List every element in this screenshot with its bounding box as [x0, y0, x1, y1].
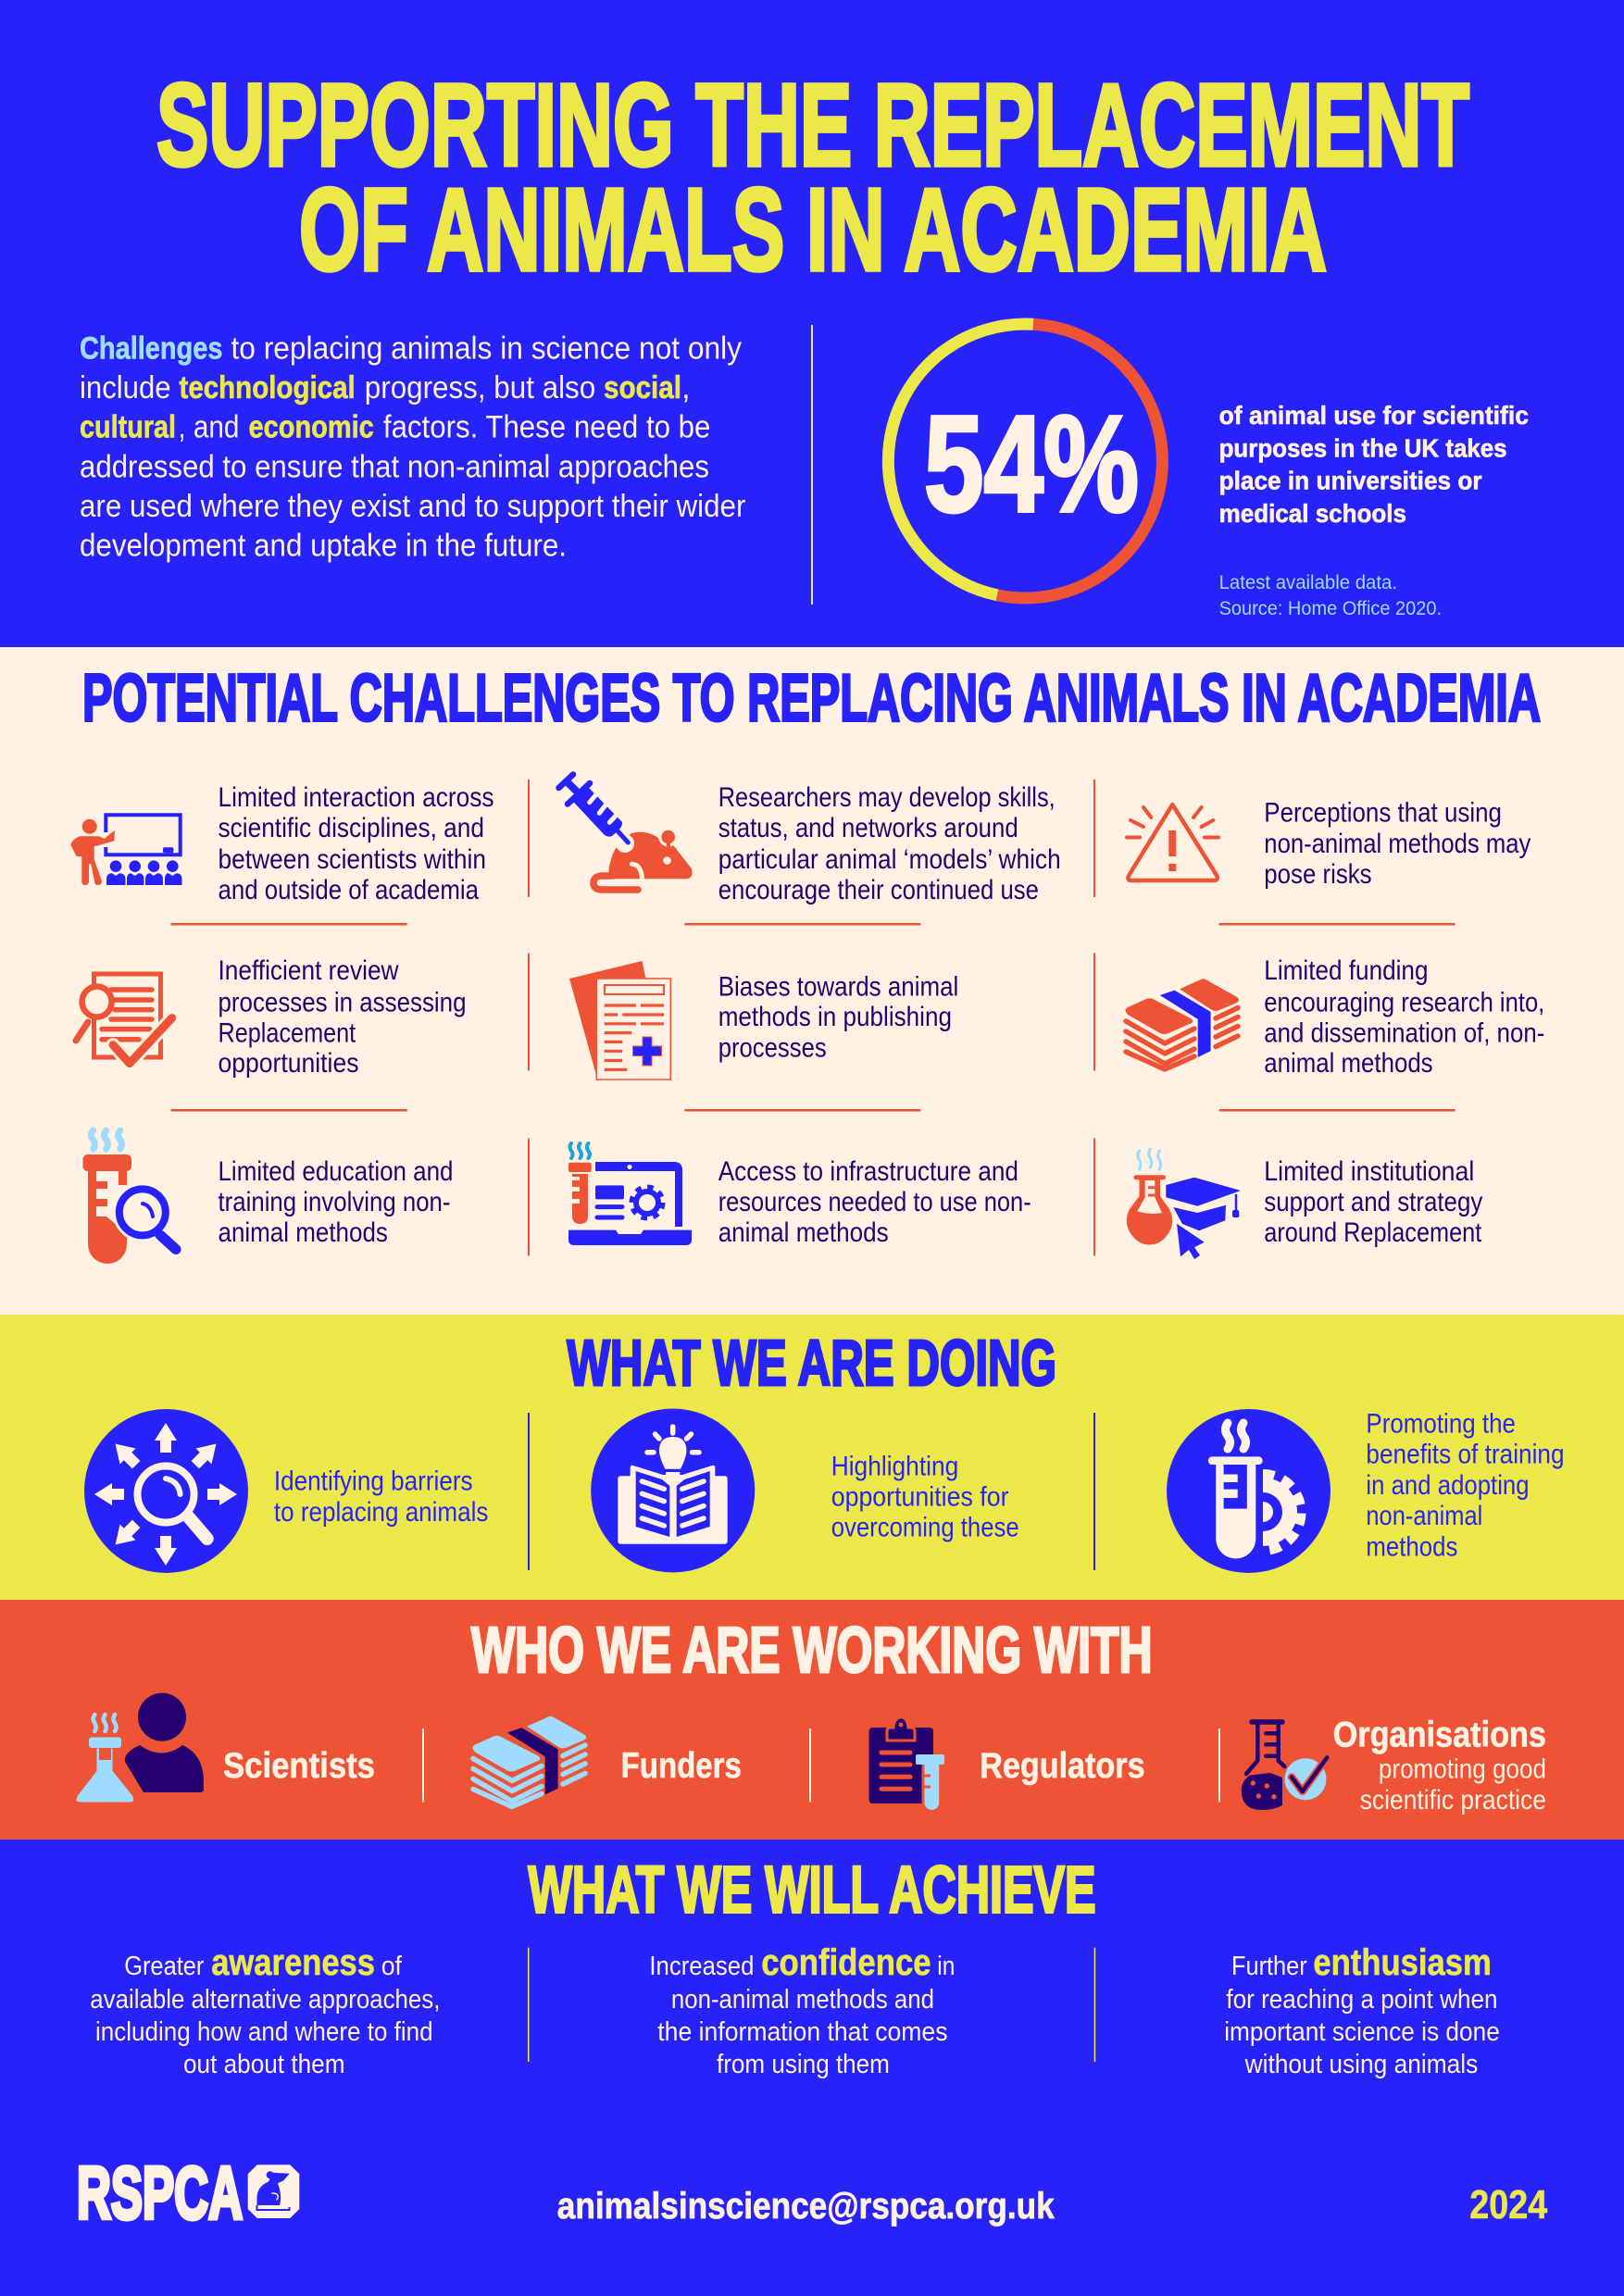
achieve: greater awareness: out about them	[183, 2050, 344, 2079]
text: highlighting	[831, 1452, 1019, 1542]
stat description: place in universities or	[1219, 467, 1482, 494]
text: limited interaction	[219, 782, 494, 905]
icon: laptop with test tube and gear	[568, 1143, 692, 1245]
text: inefficient review: Replacement	[219, 1018, 356, 1048]
text: promoting the benefits: Promoting the	[1366, 1409, 1516, 1439]
source note: Source: Home Office 2020.	[1219, 598, 1442, 619]
stat description: purposes in the UK takes	[1219, 433, 1507, 463]
text: limited interaction: Limited interaction across	[219, 782, 494, 813]
text: highlighting: opportunities for	[831, 1481, 1009, 1513]
icon: stack of banknotes	[1125, 979, 1239, 1069]
intro paragraph	[80, 331, 745, 563]
icon: warning triangle	[1127, 805, 1218, 880]
achieve: increased confidence	[649, 1942, 955, 2079]
text: identifying barriers	[274, 1466, 488, 1528]
text: access to infrastructure: resources needed to use non-	[718, 1187, 1031, 1217]
text: limited institutional: Limited institutional	[1264, 1156, 1474, 1187]
achieve: greater awareness: available alternative approaches,	[90, 1985, 440, 2015]
logo: RSPCA: RSPCA	[77, 2152, 243, 2234]
icon: teacher and audience	[71, 815, 181, 885]
icon: magnifier with arrows	[84, 1409, 248, 1573]
achieve: increased confidence: in	[937, 1952, 955, 1981]
intro paragraph: technological	[180, 370, 356, 406]
achieve: greater awareness	[90, 1942, 440, 2079]
intro paragraph: social	[604, 370, 681, 406]
label: organisations	[1333, 1715, 1546, 1816]
text: limited funding	[1264, 955, 1544, 1079]
label: organisations: Organisations	[1333, 1715, 1546, 1755]
text: inefficient review	[219, 955, 467, 1079]
title	[156, 59, 1469, 294]
icon: publishing documents	[569, 961, 670, 1079]
source note	[1219, 572, 1442, 619]
text: biases: Biases towards animal	[718, 972, 958, 1002]
text: limited funding: and dissemination of, non-	[1264, 1018, 1544, 1048]
contact email: animalsinscience@rspca.org.uk	[557, 2186, 1055, 2227]
text: limited education: animal methods	[219, 1217, 388, 1248]
label: organisations: promoting good	[1379, 1753, 1546, 1785]
intro paragraph: Challenges	[80, 331, 222, 367]
stat description	[1219, 401, 1529, 528]
achieve: greater awareness: Greater	[124, 1952, 205, 1981]
text: inefficient review: processes in assessing	[219, 987, 467, 1018]
intro paragraph: progress, but also	[365, 370, 595, 406]
text: limited funding: Limited funding	[1264, 955, 1428, 986]
intro paragraph: development and uptake in the future.	[80, 528, 567, 563]
intro paragraph: are used where they exist and to support their wider	[80, 489, 745, 524]
icon: document review	[76, 974, 172, 1064]
achieve: further enthusiasm: for reaching a point when	[1226, 1985, 1498, 2015]
achieve: greater awareness: awareness	[211, 1942, 375, 1983]
text: promoting the benefits: benefits of training	[1366, 1439, 1565, 1470]
text: limited interaction: scientific disciplines, and	[219, 813, 484, 843]
intro paragraph: factors. These need to be	[383, 409, 710, 444]
text: limited education: training involving non-	[219, 1187, 450, 1217]
text: limited education: Limited education and	[219, 1156, 454, 1187]
text: limited funding: animal methods	[1264, 1048, 1433, 1079]
stat description: medical schools	[1219, 499, 1406, 528]
achieve: greater awareness: including how and where to find	[95, 2017, 433, 2047]
intro paragraph: include	[80, 370, 171, 406]
achieve: increased confidence: Increased	[649, 1952, 754, 1981]
text: inefficient review: opportunities	[219, 1048, 359, 1079]
intro paragraph: ,	[681, 370, 691, 406]
text: limited interaction: and outside of academia	[219, 875, 479, 905]
achieve: increased confidence: from using them	[717, 2050, 890, 2079]
text: limited institutional	[1264, 1156, 1482, 1248]
heading: what we will achieve: WHAT WE WILL ACHIEVE	[528, 1853, 1096, 1928]
icon: scientist with flask	[74, 1693, 204, 1804]
achieve: further enthusiasm: Further	[1231, 1952, 1307, 1981]
text: limited funding: encouraging research into,	[1264, 987, 1544, 1018]
label: organisations: scientific practice	[1360, 1785, 1546, 1816]
text: access to infrastructure	[718, 1156, 1031, 1248]
text: inefficient review: Inefficient review	[219, 955, 399, 986]
intro paragraph: cultural	[80, 409, 176, 444]
icon: syringe and mouse	[559, 774, 693, 890]
heading: who we are working with: WHO WE ARE WORKING WITH	[471, 1614, 1152, 1686]
text: highlighting: overcoming these	[831, 1513, 1019, 1542]
icon: regulators clipboard	[868, 1717, 944, 1811]
achieve: greater awareness: of	[381, 1952, 403, 1981]
text: limited institutional: support and strategy	[1264, 1187, 1482, 1217]
icon: flask, graduation cap, cursor	[1127, 1149, 1241, 1259]
text: perceptions: non-animal methods may	[1264, 829, 1530, 859]
heading: what we are doing: WHAT WE ARE DOING	[567, 1327, 1056, 1399]
donut chart: 54%	[888, 324, 1162, 598]
year: 2024	[1469, 2182, 1548, 2227]
text: biases	[718, 972, 958, 1063]
text: promoting the benefits: non-animal	[1366, 1501, 1482, 1531]
source note: Latest available data.	[1219, 572, 1397, 593]
text: researchers	[718, 782, 1061, 905]
achieve: further enthusiasm: important science is done	[1224, 2017, 1500, 2047]
text: promoting the benefits: methods	[1366, 1531, 1457, 1563]
text: researchers: Researchers may develop skills,	[718, 782, 1056, 813]
icon: open book with light bulb	[591, 1409, 755, 1572]
text: researchers: encourage their continued use	[718, 875, 1039, 905]
label: regulators: Regulators	[980, 1746, 1145, 1786]
achieve: increased confidence: the information that comes	[657, 2017, 948, 2047]
donut chart: 54%: 54%	[924, 388, 1139, 541]
text: perceptions	[1264, 798, 1530, 890]
text: identifying barriers: Identifying barriers	[274, 1466, 473, 1496]
text: highlighting: Highlighting	[831, 1452, 958, 1481]
icon: test tube with gear	[1167, 1409, 1330, 1573]
text: biases: methods in publishing	[718, 1002, 952, 1032]
label: funders: Funders	[621, 1746, 742, 1786]
text: researchers: status, and networks around	[718, 813, 1018, 843]
intro paragraph: to replacing animals in science not only	[231, 331, 743, 367]
intro paragraph: economic	[248, 409, 374, 444]
intro paragraph: , and	[178, 409, 239, 444]
intro paragraph: addressed to ensure that non-animal approaches	[80, 450, 709, 485]
achieve: further enthusiasm	[1224, 1942, 1500, 2079]
text: biases: processes	[718, 1033, 827, 1063]
icon: test tube and magnifier	[83, 1130, 176, 1264]
text: promoting the benefits	[1366, 1409, 1565, 1563]
text: identifying barriers: to replacing animals	[274, 1497, 488, 1528]
icon: flask with check mark	[1242, 1722, 1327, 1810]
achieve: further enthusiasm: enthusiasm	[1313, 1942, 1492, 1983]
text: limited interaction: between scientists within	[219, 844, 486, 875]
text: limited education	[219, 1156, 454, 1248]
achieve: increased confidence: confidence	[761, 1942, 931, 1983]
text: researchers: particular animal ‘models’ which	[718, 844, 1061, 875]
achieve: increased confidence: non-animal methods and	[671, 1985, 934, 2015]
achieve: further enthusiasm: without using animals	[1244, 2050, 1478, 2079]
text: promoting the benefits: in and adopting	[1366, 1470, 1530, 1501]
text: perceptions: pose risks	[1264, 859, 1372, 890]
label: scientists: Scientists	[223, 1746, 375, 1786]
text: access to infrastructure: animal methods	[718, 1217, 889, 1248]
stat description: of animal use for scientific	[1219, 401, 1529, 430]
text: perceptions: Perceptions that using	[1264, 798, 1502, 828]
text: limited institutional: around Replacement	[1264, 1217, 1482, 1248]
icon: funders banknotes	[472, 1716, 586, 1807]
text: access to infrastructure: Access to infrastructure and	[718, 1156, 1018, 1187]
